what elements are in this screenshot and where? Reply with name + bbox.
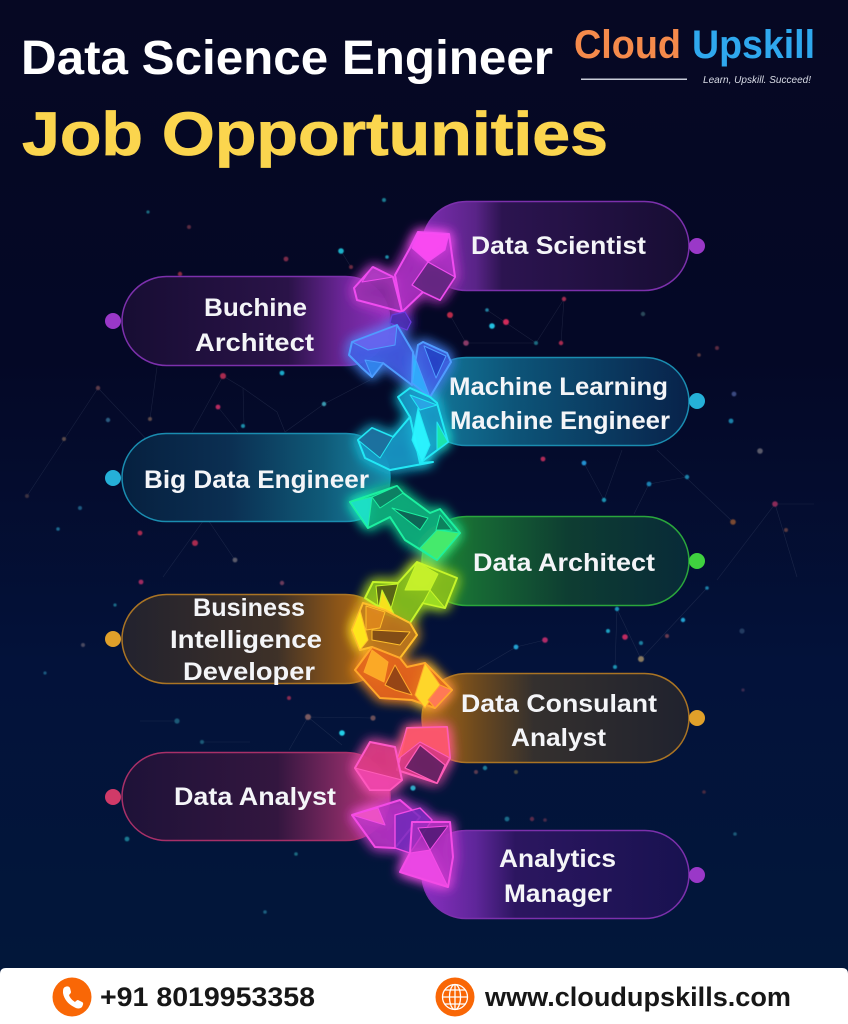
crystal: pink upper xyxy=(355,727,450,790)
panel: Big Data Engineer: Big Data Engineer xyxy=(144,466,369,494)
crystal: magenta upper xyxy=(354,232,455,330)
crystal: green xyxy=(350,486,460,560)
crystal: red orange xyxy=(355,647,452,708)
logo: Cloud Upskill: Learn, Upskill. Succeed! xyxy=(703,74,811,86)
panel: Data Analyst: Data Analyst xyxy=(174,783,337,811)
footer bar xyxy=(0,968,848,1024)
panel: Buchine Architect xyxy=(105,276,390,366)
crystal: magenta lower xyxy=(352,800,453,887)
crystal: cyan xyxy=(358,388,448,470)
panel: Analytics Manager xyxy=(422,830,705,918)
title: Data Science Engineer: Data Science Engineer xyxy=(21,32,553,85)
panel: Machine Learning Machine Engineer xyxy=(422,358,705,446)
panel: Data Scientist xyxy=(422,202,705,290)
panel: Data Consulant Analyst: Analyst xyxy=(511,724,607,752)
icon: globe xyxy=(436,978,474,1016)
panel: Data Consulant Analyst xyxy=(422,674,705,762)
crystal: orange xyxy=(352,603,417,658)
panel: Data Analyst xyxy=(105,752,390,840)
panel: Buchine Architect: Architect xyxy=(195,329,315,357)
panel: Data Scientist: Data Scientist xyxy=(471,232,647,260)
panel: Data Architect xyxy=(422,516,705,606)
panel: Business Intelligence Developer xyxy=(105,594,390,686)
panel: Business Intelligence Developer: Developer xyxy=(183,658,315,686)
website: www.cloudupskills.com xyxy=(484,982,791,1012)
panel: Machine Learning Machine Engineer: Machine Engineer xyxy=(450,407,670,435)
crystal: violet to blue xyxy=(349,325,451,397)
chain of crystals xyxy=(349,232,460,887)
panel: Data Consulant Analyst: Data Consulant xyxy=(461,690,658,718)
crystal: lime xyxy=(365,562,457,623)
panel: Big Data Engineer xyxy=(105,434,390,522)
panel: Buchine Architect: Buchine xyxy=(204,294,307,322)
logo: Cloud Upskill: Upskill xyxy=(692,23,815,67)
panel: Data Architect: Data Architect xyxy=(473,549,656,577)
logo: Cloud Upskill: Cloud xyxy=(574,23,681,67)
panel: Business Intelligence Developer: Business xyxy=(193,594,305,622)
panel: Machine Learning Machine Engineer: Machine Learning xyxy=(449,373,668,401)
icon: phone xyxy=(52,978,92,1016)
logo: Cloud Upskill xyxy=(574,23,815,86)
panel: Analytics Manager: Manager xyxy=(504,880,612,908)
title: Job Opportunities: Job Opportunities xyxy=(22,100,608,168)
panel: Business Intelligence Developer: Intelligence xyxy=(170,626,322,654)
panel: Analytics Manager: Analytics xyxy=(499,845,616,873)
phone number: +91 8019953358 xyxy=(100,982,315,1012)
